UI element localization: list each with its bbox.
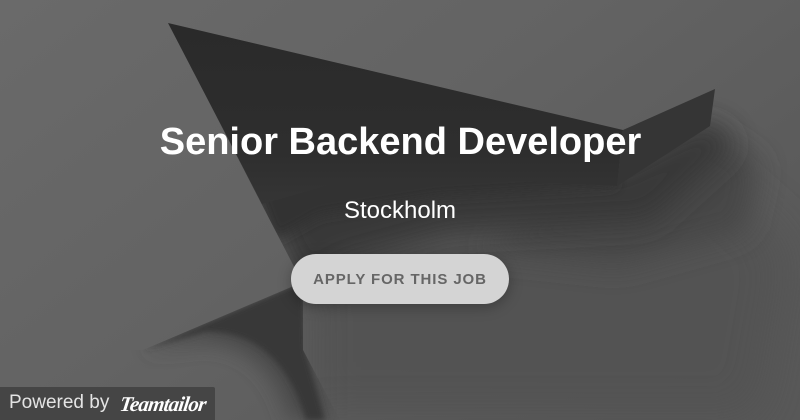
- apply button: [291, 254, 509, 304]
- location: Stockholm: [344, 197, 456, 224]
- lower left fold shadow: [143, 282, 330, 420]
- apply button: APPLY FOR THIS JOB: [313, 271, 487, 288]
- title: Senior Backend Developer: [160, 121, 641, 163]
- dark wall front face: [168, 23, 623, 204]
- Teamtailor logo: Teamtailor: [118, 392, 207, 416]
- powered by text: Powered by: [9, 392, 109, 413]
- wall right face: [617, 89, 715, 186]
- powered by badge: [0, 387, 215, 420]
- floor and wall shadow, clipped by the fold's left edge: [230, 120, 790, 420]
- background: abstract folded shadow shapes: [145, 23, 800, 420]
